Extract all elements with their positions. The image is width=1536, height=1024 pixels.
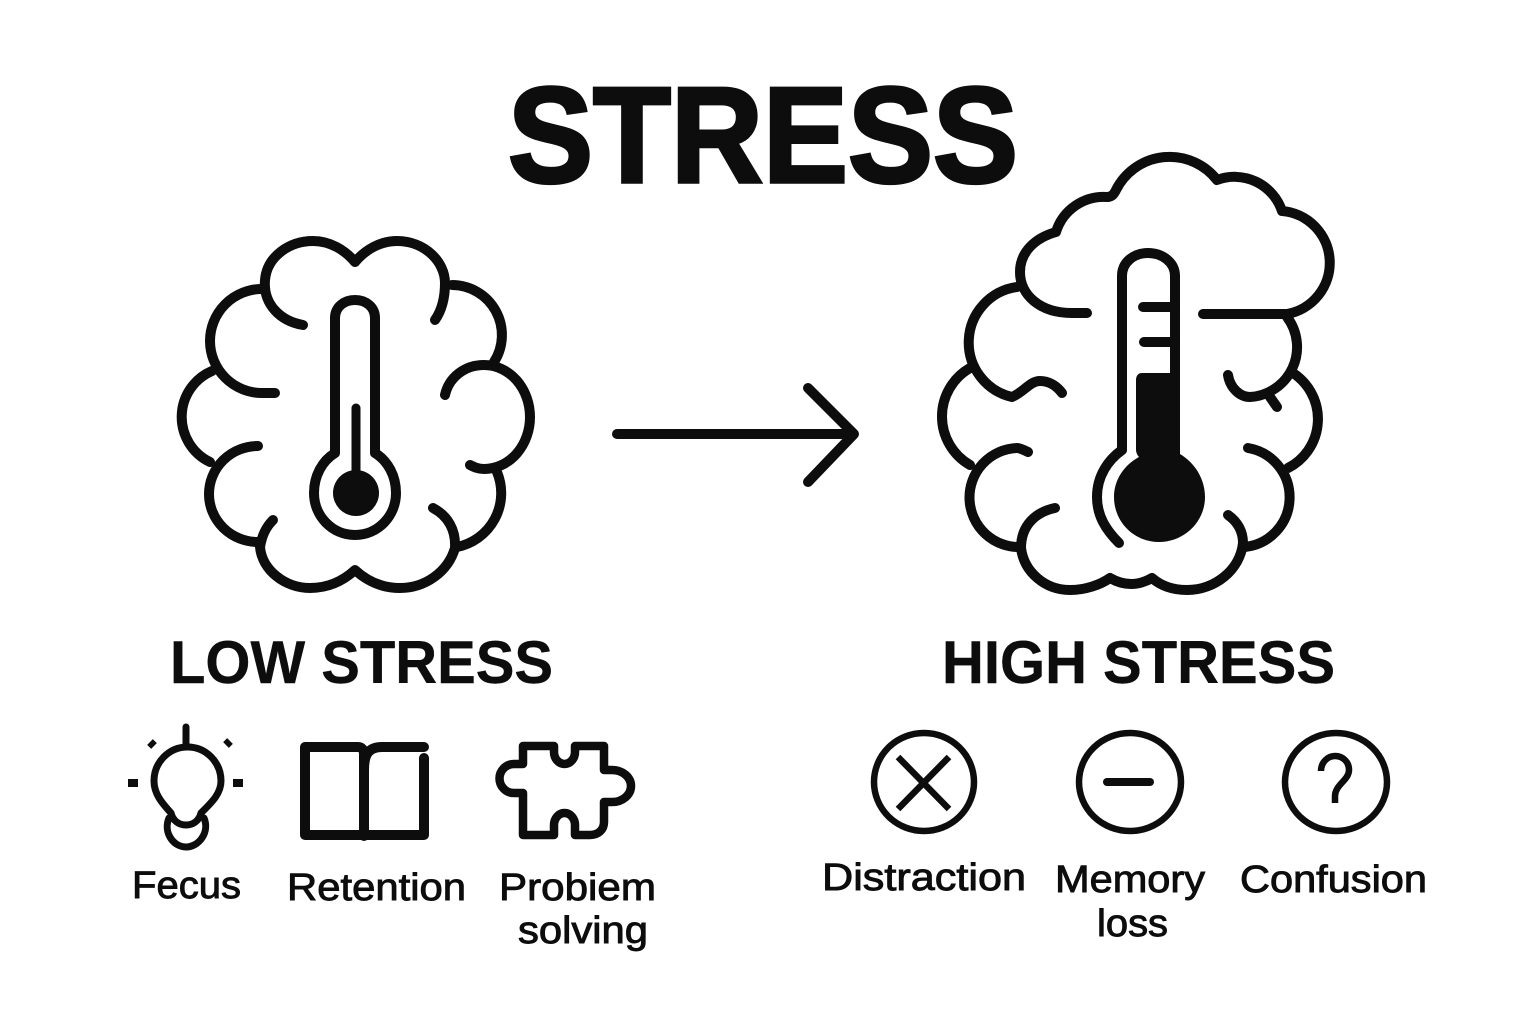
- icon: lightbulb: [128, 727, 243, 847]
- icon: brain with high thermometer: [942, 157, 1330, 590]
- brain outline: [182, 241, 530, 588]
- title: STRESS: [508, 59, 1018, 211]
- panel: low stress: [128, 241, 656, 952]
- arrow: [617, 388, 854, 482]
- label: memory loss: Memory: [1055, 859, 1205, 901]
- panel: high stress: [822, 157, 1427, 945]
- icon: puzzle piece: [500, 746, 631, 835]
- item: problem solving: [499, 746, 656, 952]
- icon: minus in circle: [1079, 733, 1181, 831]
- heading: high stress: HIGH STRESS: [942, 629, 1335, 696]
- item: focus: [128, 727, 243, 907]
- item: confusion: [1240, 733, 1427, 901]
- brain outline: [942, 157, 1330, 590]
- thermometer: [314, 300, 396, 535]
- item: memory loss: loss: [1097, 903, 1168, 945]
- item: retention: [287, 747, 466, 909]
- item: distraction: [822, 733, 1026, 899]
- heading: low stress: LOW STRESS: [170, 629, 553, 696]
- label: distraction: Distraction: [822, 857, 1026, 899]
- label: retention: Retention: [287, 867, 466, 909]
- icon: open book: [305, 747, 424, 836]
- icon: question in circle: [1285, 733, 1387, 831]
- item: memory loss: [1055, 733, 1205, 945]
- item: problem solving: solving: [518, 910, 648, 952]
- label: focus: Fecus: [132, 865, 241, 907]
- label: problem solving: Probiem: [499, 867, 656, 909]
- icon: x in circle: [874, 733, 974, 831]
- thermometer: [1097, 253, 1205, 543]
- icon: brain with low thermometer: [182, 241, 530, 588]
- label: confusion: Confusion: [1240, 859, 1427, 901]
